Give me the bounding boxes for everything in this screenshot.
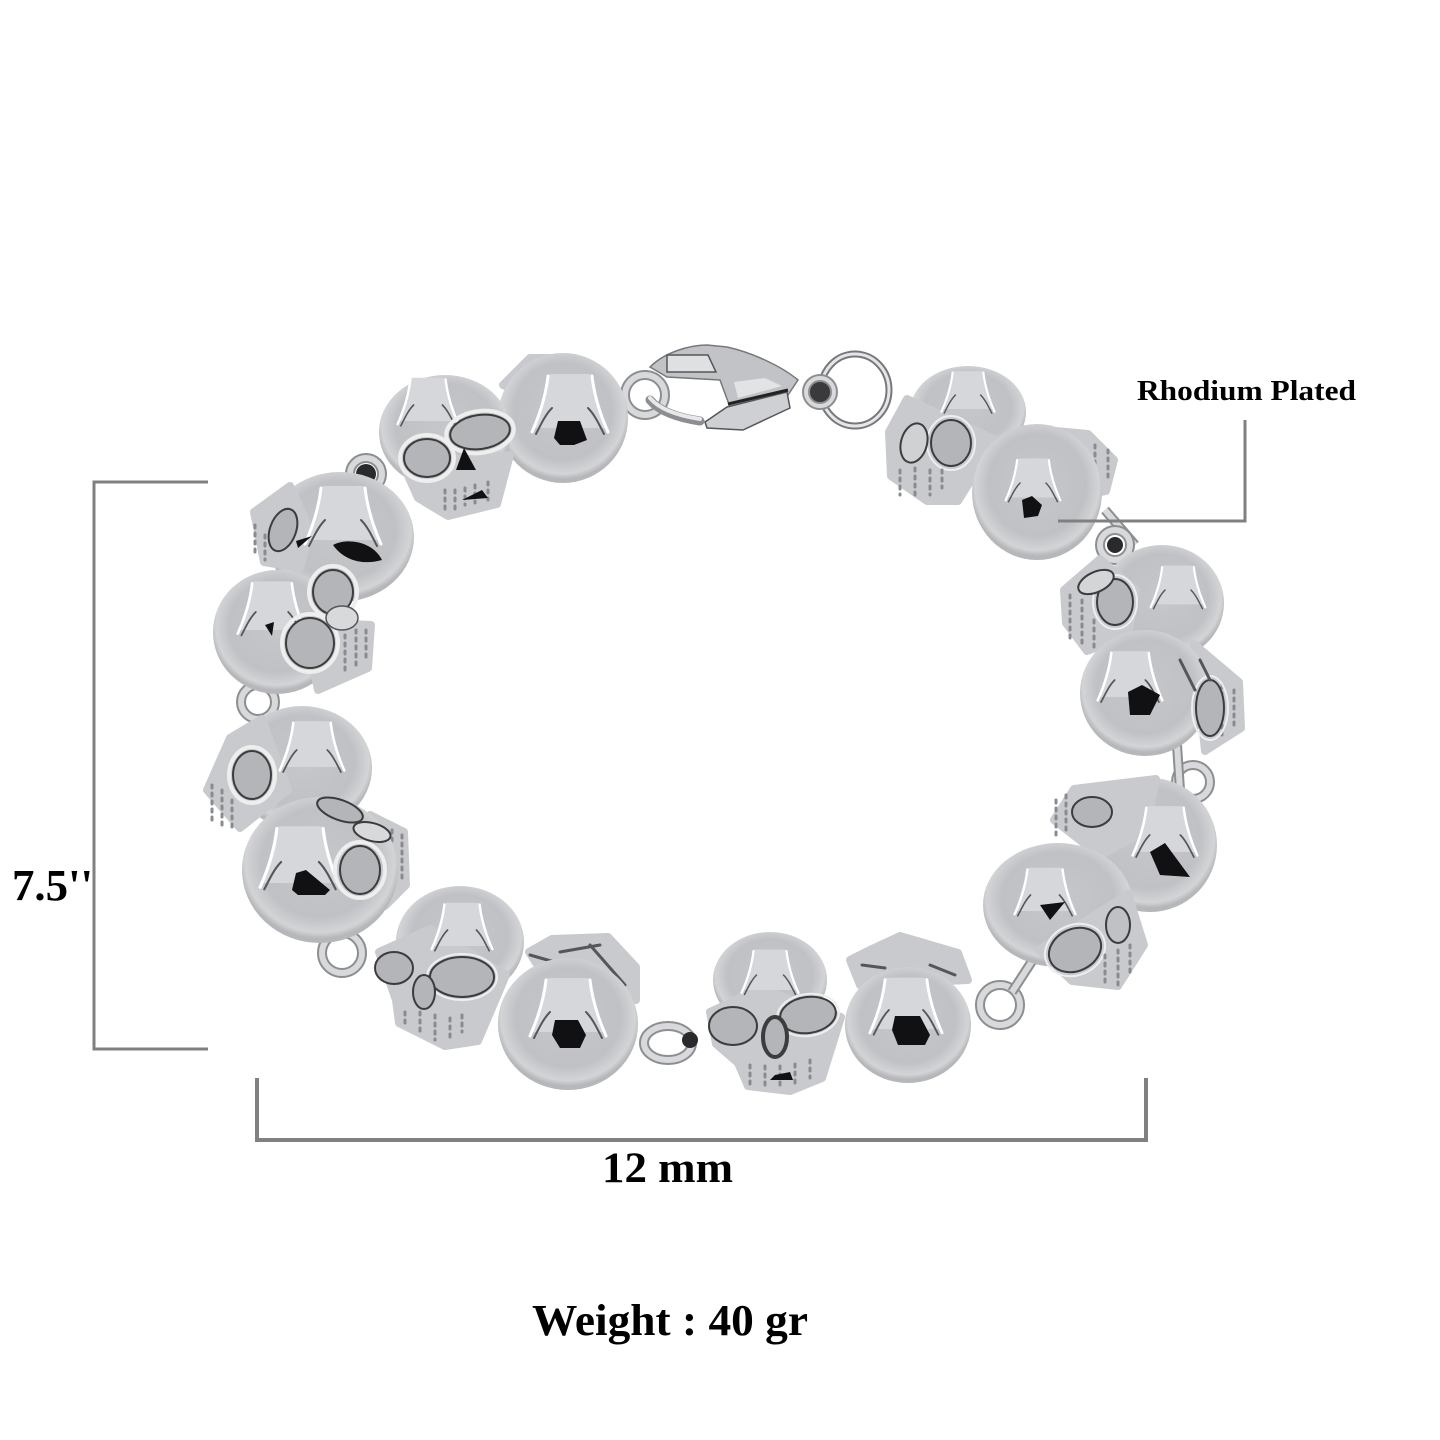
skull: right middle ball, face to right: [1080, 630, 1241, 756]
skull: bottom center ball with crown to top: [845, 936, 971, 1083]
skull: top right ball: [972, 424, 1114, 560]
skull: top, back of head ball: [498, 353, 628, 483]
small jump ring: [809, 381, 831, 403]
skull: left ball with face to right: [213, 566, 371, 694]
clasp lower bar: [705, 392, 790, 430]
skull: right upper, face to left: [1064, 545, 1224, 661]
label: 7.5 inch length: 7.5'': [12, 861, 93, 910]
chain links: [241, 458, 1210, 1060]
clasp body: [650, 345, 798, 407]
height dimension bracket: [94, 482, 208, 1049]
skull: top right, facing left: [889, 366, 1026, 501]
skull: lower right, face to upper left: [1054, 778, 1217, 912]
skull: bottom center, facing front: [709, 932, 842, 1091]
skull: lower left ball with face to right: [242, 792, 406, 943]
skull: bottom left, facing front: [375, 886, 524, 1046]
bracelet: [207, 345, 1241, 1091]
label: rhodium plated: Rhodium Plated: [1137, 375, 1356, 407]
skull: bottom ball with crown to top: [498, 937, 638, 1090]
width dimension bracket: [257, 1078, 1146, 1140]
rhodium plated leader line: [1058, 420, 1245, 521]
skull: mid left, face to left: [207, 706, 372, 830]
clasp: [625, 345, 889, 430]
clasp hook lower arc: [650, 400, 700, 421]
skull: upper left, ball with face to left: [254, 472, 414, 602]
label: weight: Weight : 40 gr: [532, 1296, 808, 1345]
skull: lower right front skull: [983, 843, 1144, 986]
label: 12 mm width: 12 mm: [602, 1145, 733, 1192]
skull: top left, facing front: [379, 375, 517, 516]
left jump ring: [625, 375, 665, 415]
big jump ring: [821, 354, 889, 426]
